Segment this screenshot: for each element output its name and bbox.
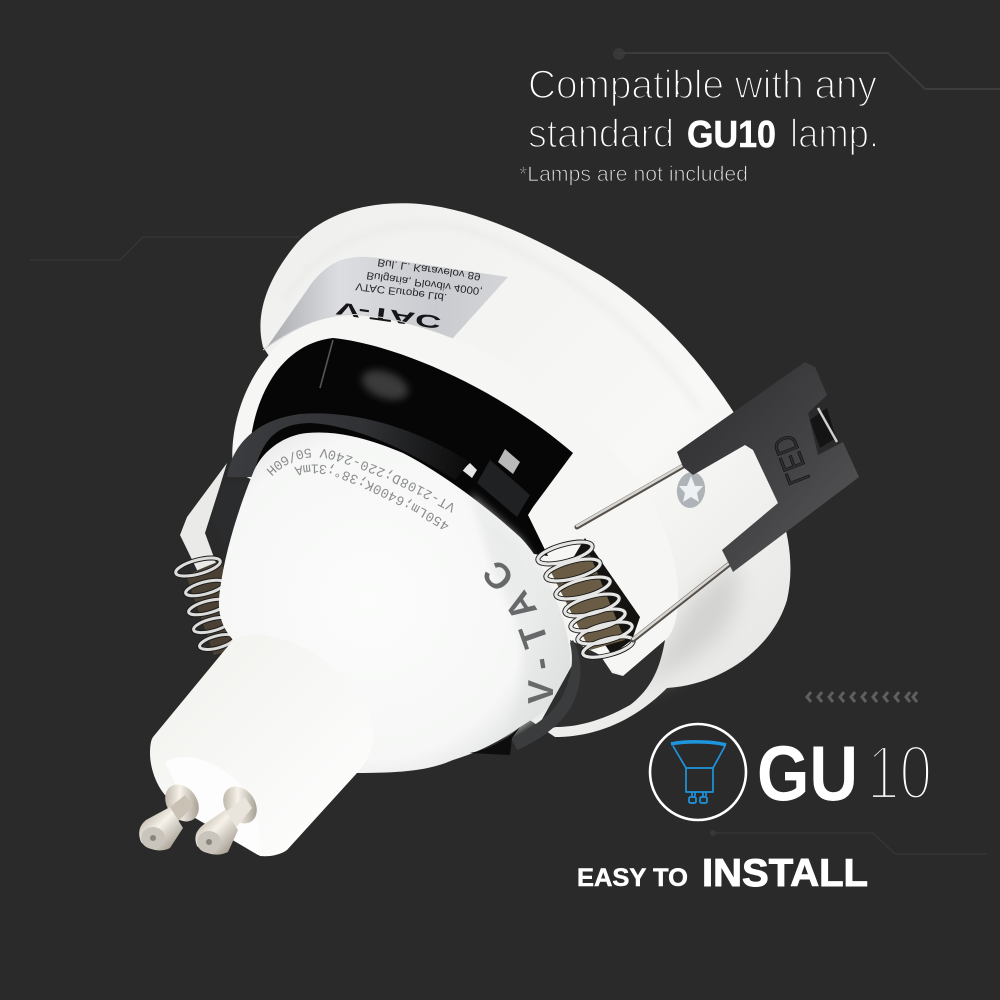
rating label	[267, 256, 508, 347]
label: address: VTAC Europe Ltd.	[355, 280, 448, 303]
GU10 label: GU	[757, 729, 858, 817]
label: address: Bulgaria, Plovdiv 4000,	[366, 269, 483, 297]
label: address: Bul. L. Karavelov 89	[377, 256, 482, 282]
lamp print: V-TAC logo: V-TAC	[484, 562, 553, 704]
circuit line: lower right	[710, 830, 987, 854]
tagline: easy to install: EASY TO	[577, 864, 688, 892]
right spring	[536, 538, 640, 661]
lamp rim band	[470, 492, 570, 740]
housing rim edge	[263, 315, 453, 350]
label: address	[355, 256, 483, 303]
flange inner crease	[285, 225, 700, 410]
headline line 2: GU10	[687, 114, 776, 156]
lamp print: model: VT-2108D;220-240V 50/60Hz	[266, 448, 454, 513]
GU10 label	[757, 729, 932, 817]
headline: compatible lamps	[528, 63, 879, 156]
downlight product photo illustration	[139, 203, 859, 856]
handle wire	[818, 408, 837, 442]
lamp body	[219, 432, 570, 773]
headline line 1: Compatible with any	[528, 63, 877, 107]
circuit line: left	[30, 237, 300, 260]
lamp neck	[150, 635, 374, 856]
lower black ring and socket interior	[470, 640, 665, 755]
GU10 label: 10	[867, 730, 932, 816]
tagline: easy to install: INSTALL	[702, 852, 868, 895]
left spring	[174, 554, 236, 655]
screw	[675, 470, 707, 510]
icon: GU10 lamp in circle	[650, 724, 746, 820]
clip handle	[677, 362, 859, 572]
dark opening	[249, 338, 573, 556]
handle cut-out	[810, 408, 836, 448]
outer flange	[260, 203, 790, 737]
lamp pin left	[139, 778, 206, 850]
tagline: easy to install	[577, 852, 868, 895]
footnote: *Lamps are not included	[519, 163, 748, 186]
lamp neck end face	[165, 757, 259, 855]
wire clips	[577, 464, 732, 640]
gimbal ring	[227, 413, 470, 480]
housing body	[232, 317, 678, 676]
lamp pin right	[195, 780, 264, 855]
left dark mount	[213, 483, 256, 545]
circuit line: top right	[613, 48, 1000, 89]
opening reflections	[320, 340, 530, 517]
headline line 2: standard	[528, 112, 674, 156]
headline line 2: lamp.	[790, 112, 879, 156]
left clip bracket	[180, 463, 227, 572]
chevron row	[807, 692, 917, 702]
flange soft shading	[640, 560, 739, 690]
handle moulded text: LED	[766, 430, 817, 490]
lamp print: rating: 450Lm;6400K;38°;31mA	[294, 464, 448, 530]
label: logo: V-TAC	[335, 298, 443, 333]
lamp glyph	[671, 742, 726, 803]
headline line 2	[528, 112, 879, 156]
